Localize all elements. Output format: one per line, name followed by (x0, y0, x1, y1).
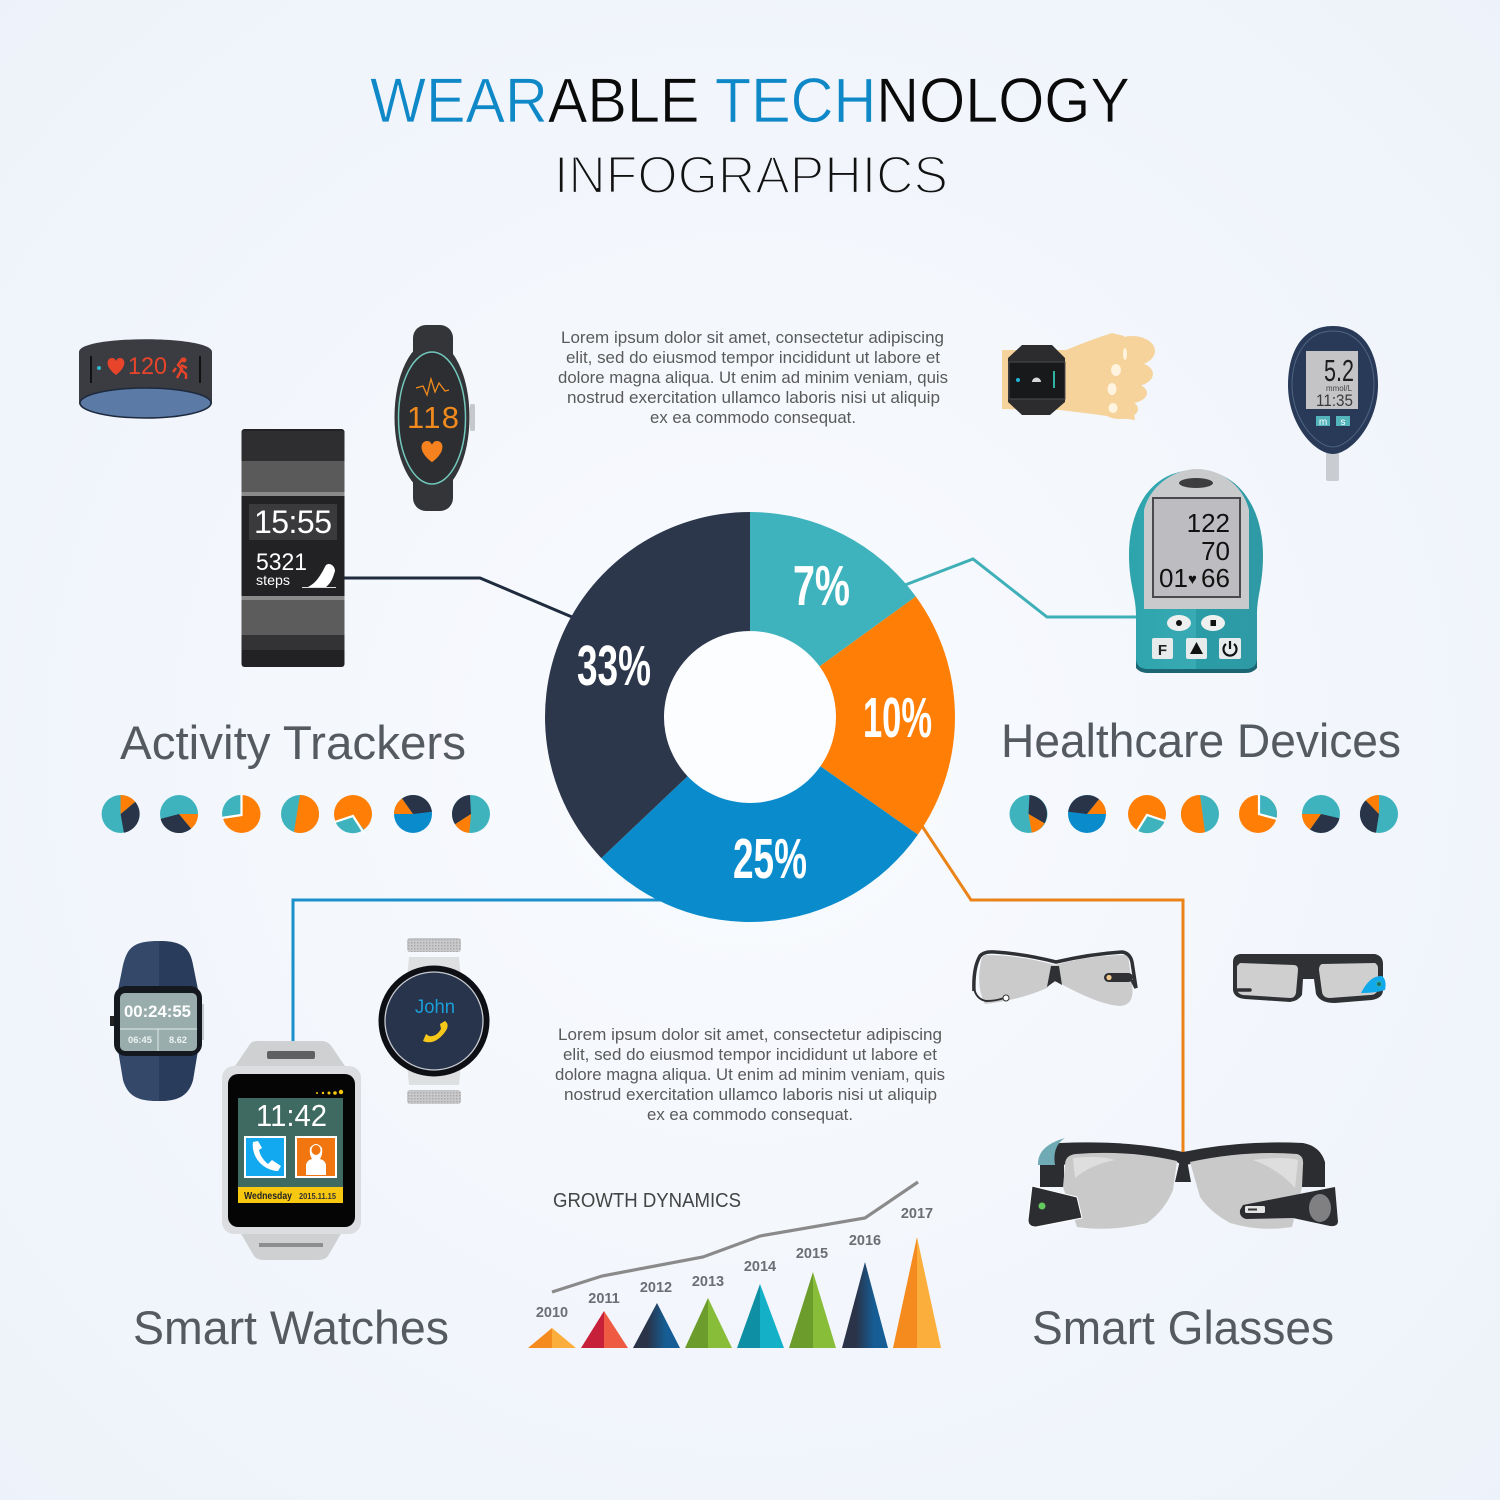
device: heart rate watch: 118 (407, 400, 459, 435)
growth dynamics chart (528, 1182, 941, 1348)
device: blood pressure monitor: F (1158, 642, 1167, 659)
year labels: 2016 (849, 1233, 881, 1249)
device: fitness band: 120 (128, 353, 167, 380)
trend line (552, 1182, 918, 1292)
title (370, 66, 1130, 205)
device: watch on wrist (1002, 333, 1155, 420)
heading: Smart Glasses: Smart Glasses (1032, 1301, 1334, 1354)
year labels (536, 1206, 933, 1321)
connector: activity trackers (344, 578, 572, 617)
device: blood pressure monitor: 66 (1201, 563, 1230, 593)
device: glucose meter: mmol/L (1326, 383, 1352, 393)
title: INFOGRAPHICS (554, 146, 948, 205)
device: blood pressure monitor: 122 (1187, 508, 1230, 538)
text block: lower description (555, 1026, 945, 1124)
segment: 7% teal (750, 512, 916, 666)
text block: lower description: Lorem ipsum dolor sit amet, consectetur adipiscing (558, 1026, 942, 1044)
heading: Smart Watches: Smart Watches (133, 1301, 449, 1354)
device: activity tracker band (242, 429, 344, 667)
device: blood pressure monitor: ♥ (1188, 571, 1197, 588)
device: glucose meter: 11:35 (1316, 391, 1353, 410)
text block: top description: Lorem ipsum dolor sit amet, consectetur adipiscing (561, 329, 944, 347)
year labels: 2017 (901, 1206, 933, 1222)
device: activity tracker band: 5321 (256, 549, 307, 576)
donut chart (545, 512, 955, 922)
connector: smart glasses (922, 826, 1183, 1152)
mini pies: activity trackers row (102, 794, 490, 833)
text block: lower description: elit, sed do eiusmod tempor incididunt ut labore et (563, 1046, 937, 1064)
device: heart rate watch (394, 325, 475, 511)
connector: healthcare devices (905, 559, 1137, 617)
device: smart glasses left (974, 952, 1136, 1006)
text block: top description (558, 329, 948, 427)
text block: top description: ex ea commodo consequat. (650, 409, 856, 427)
device: round smartwatch: John (415, 997, 455, 1018)
heading: Activity Trackers: Activity Trackers (120, 716, 466, 769)
year labels: 2013 (692, 1274, 724, 1290)
device: navy sports watch: 06:45 (128, 1035, 153, 1046)
label: 25%: 25% (733, 827, 807, 891)
text block: lower description: dolore magna aliqua. Ut enim ad minim veniam, quis (555, 1066, 945, 1084)
device: navy sports watch: 00:24:55 (124, 1002, 191, 1021)
device: smart glasses main (1028, 1138, 1338, 1229)
chart title: GROWTH DYNAMICS (553, 1190, 741, 1212)
mini pies: healthcare devices row (1010, 794, 1398, 833)
device: blood pressure monitor: 01 (1159, 563, 1188, 593)
text block: lower description: ex ea commodo consequat. (647, 1106, 853, 1124)
year labels: 2012 (640, 1280, 672, 1296)
text block: top description: nostrud exercitation ullamco laboris nisi ut aliquip (567, 389, 940, 407)
segment: 25% blue (601, 766, 918, 922)
device: square smartwatch (222, 1041, 361, 1260)
text block: lower description: nostrud exercitation ullamco laboris nisi ut aliquip (564, 1086, 937, 1104)
device: round smartwatch (378, 938, 490, 1104)
label: 7%: 7% (793, 554, 850, 618)
device: square smartwatch: 11:42 (256, 1098, 327, 1133)
label: 10%: 10% (863, 686, 932, 750)
text block: top description: dolore magna aliqua. Ut enim ad minim veniam, quis (558, 369, 948, 387)
device: glucose meter: m (1319, 417, 1327, 428)
text block: top description: elit, sed do eiusmod tempor incididunt ut labore et (566, 349, 940, 367)
device: navy sports watch (110, 941, 204, 1101)
label: 33%: 33% (577, 634, 651, 698)
device: blood pressure monitor (1129, 469, 1263, 673)
device: activity tracker band: 15:55 (254, 504, 332, 540)
year labels: 2011 (588, 1291, 620, 1307)
device: glucose meter: s (1340, 417, 1346, 428)
year labels: 2015 (796, 1246, 828, 1262)
device: glucose meter: 5.2 (1324, 353, 1354, 388)
device: glucose meter (1288, 326, 1378, 481)
heading: Healthcare Devices: Healthcare Devices (1001, 714, 1401, 767)
device: navy sports watch: 8.62 (169, 1035, 187, 1046)
device: activity tracker band: steps (256, 572, 290, 588)
device: fitness band (79, 339, 212, 418)
donut hole (664, 631, 836, 803)
year labels: 2010 (536, 1305, 568, 1321)
segment: 33% navy (545, 512, 750, 858)
year labels: 2014 (744, 1259, 776, 1275)
device: blood pressure monitor: 70 (1201, 536, 1230, 566)
triangle bars (528, 1237, 941, 1348)
title: WEARABLE TECHNOLOGY (370, 66, 1130, 136)
segment: 10% orange (820, 596, 955, 835)
device: square smartwatch: 2015.11.15 (299, 1192, 337, 1201)
connector: smart watches (293, 900, 665, 1042)
device: smart glasses right (1233, 954, 1386, 1003)
device: square smartwatch: Wednesday (244, 1190, 292, 1202)
